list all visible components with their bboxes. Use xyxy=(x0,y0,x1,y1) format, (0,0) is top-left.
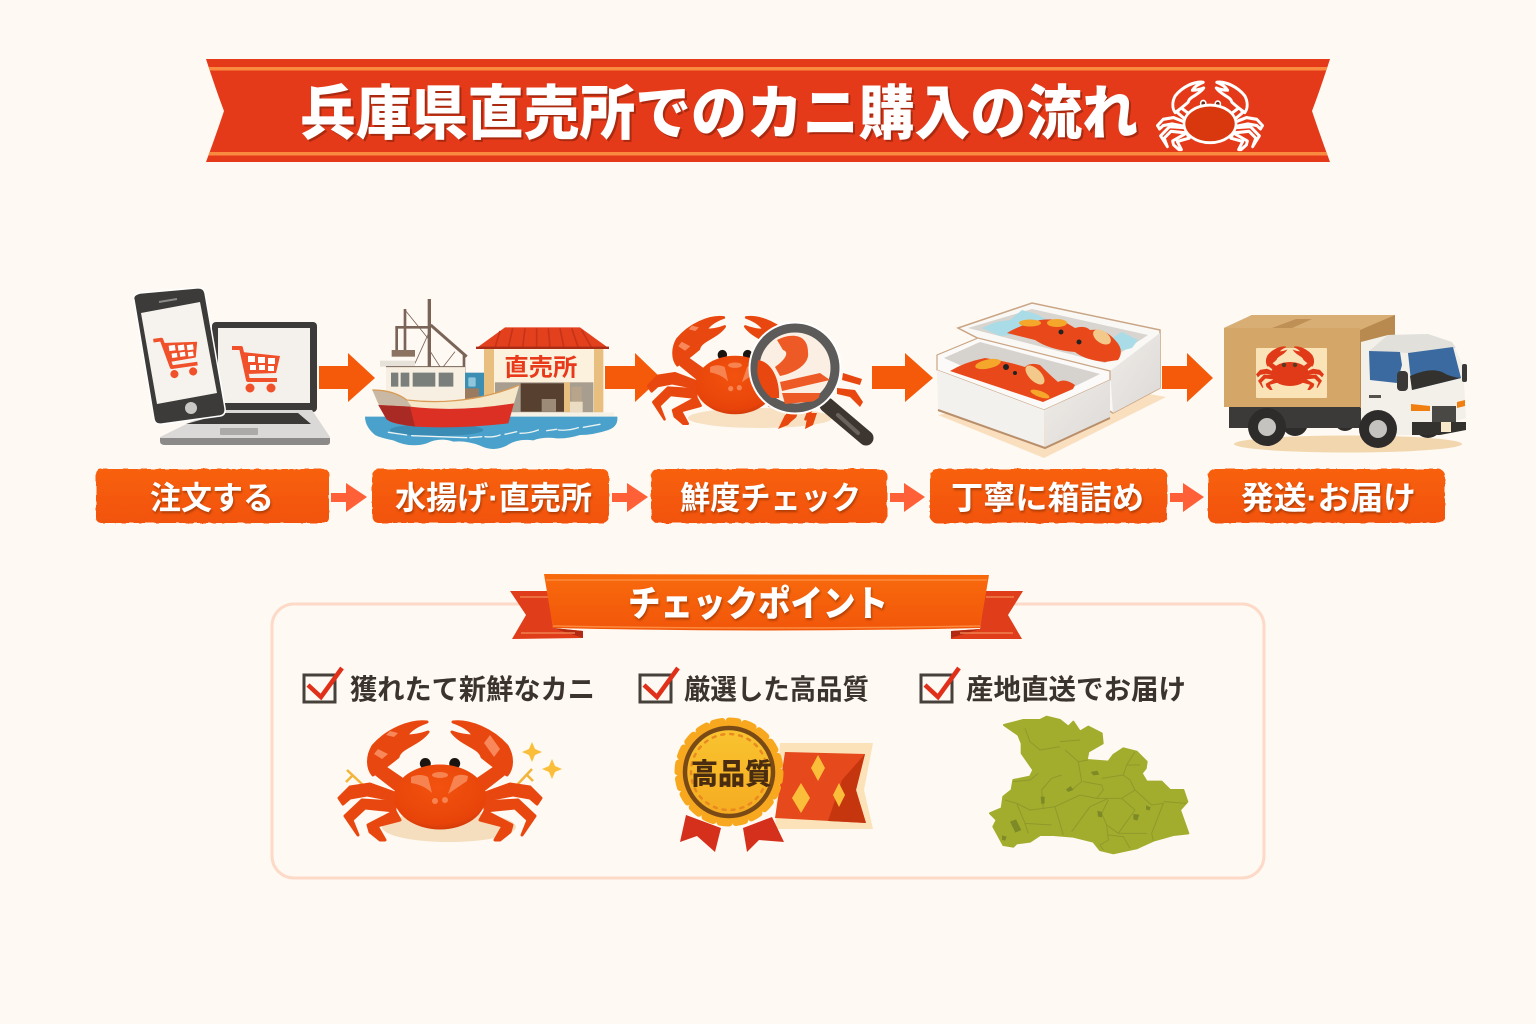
front box xyxy=(937,338,1110,448)
hull xyxy=(372,385,519,409)
rear wheels behind chassis xyxy=(1282,410,1308,436)
shop xyxy=(476,327,614,417)
icon: Hyogo prefecture map xyxy=(990,717,1188,853)
step 1 icon: phone and laptop with carts xyxy=(134,288,330,445)
cabin xyxy=(380,361,415,367)
icon: quality medal and flag xyxy=(678,721,873,852)
crab label xyxy=(1257,347,1323,389)
label: step 3: 鮮度チェック xyxy=(680,480,861,516)
water xyxy=(365,417,617,449)
arrow: step 2 to 3 xyxy=(605,353,661,402)
ribbon heading xyxy=(510,574,1023,639)
small arrow 4 xyxy=(1170,483,1204,512)
step labels xyxy=(96,469,1445,523)
label: step 2 xyxy=(372,469,609,523)
arrow: step 1 to 2 xyxy=(319,353,375,402)
chassis xyxy=(1229,406,1369,428)
check item 1 xyxy=(304,668,595,705)
ribbon text: チェックポイント xyxy=(628,583,888,624)
arrow: step 3 to 4 xyxy=(872,353,933,402)
masts and rigging xyxy=(395,299,467,392)
small arrow 2 xyxy=(612,483,648,512)
cab xyxy=(1361,334,1467,435)
magnifier xyxy=(748,322,866,438)
label: step 5: 発送·お届け xyxy=(1241,480,1416,516)
arrow: step 4 to 5 xyxy=(1162,353,1213,402)
check item 3 xyxy=(921,668,1186,705)
small arrow 1 xyxy=(331,483,367,512)
icon: big crab with sparkles xyxy=(339,722,562,842)
icon: title crab xyxy=(1157,82,1263,150)
back box xyxy=(958,303,1160,413)
check item 1: 獲れたて新鮮なカニ xyxy=(350,674,595,705)
step 4 icon: packed foam boxes xyxy=(937,303,1166,458)
step 2 icon: fishing boat and direct sale shop xyxy=(365,299,617,449)
title banner xyxy=(200,59,1336,162)
label: step 1: 注文する xyxy=(150,480,274,516)
check item 2: 厳選した高品質 xyxy=(684,674,869,705)
label: step 1 xyxy=(96,469,329,523)
check item 3: 産地直送でお届け xyxy=(966,674,1186,705)
label: step 2: 水揚げ·直売所 xyxy=(395,480,592,516)
label: step 3 xyxy=(651,469,887,523)
step 5 icon: delivery truck xyxy=(1224,315,1467,452)
panel: check points xyxy=(272,574,1264,878)
title text: 兵庫県直売所でのカニ購入の流れ xyxy=(300,81,1138,147)
shop sign text: 直売所 xyxy=(504,354,577,381)
check item 2 xyxy=(640,668,869,705)
cargo box xyxy=(1224,315,1395,408)
label: step 4: 丁寧に箱詰め xyxy=(951,480,1144,516)
medal text: 高品質 xyxy=(691,758,772,791)
wheels xyxy=(1248,408,1397,448)
label: step 4 xyxy=(930,469,1167,523)
step 3 icon: crab under magnifier xyxy=(648,317,866,438)
small arrow 3 xyxy=(890,483,925,512)
label: step 5 xyxy=(1208,469,1445,523)
